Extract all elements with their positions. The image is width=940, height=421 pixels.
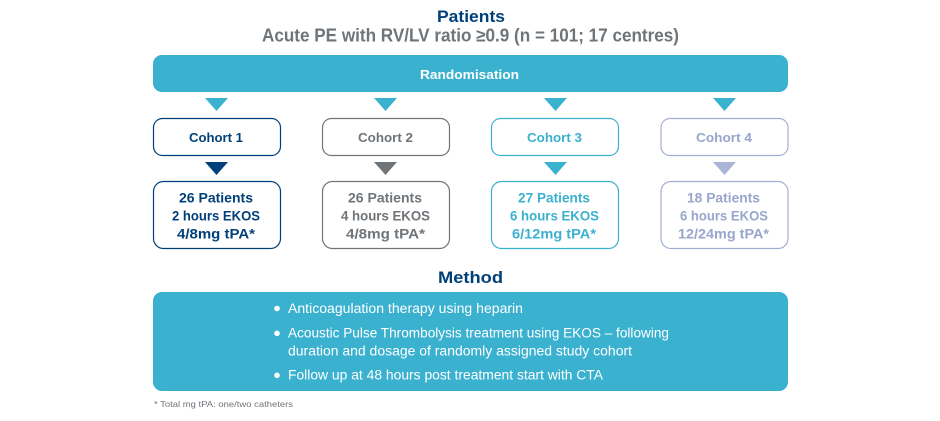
arrow: randomisation to cohort 1 [205, 98, 228, 111]
panel: cohort 1 details: 4/8mg tPA* [177, 226, 256, 242]
panel: cohort 1 [154, 118, 280, 156]
subtitle: inclusion criteria: Acute PE with RV/LV ratio ≥0.9 (n = 101; 17 centres) [262, 26, 679, 46]
bullet: acoustic pulse thrombolysis: Acoustic Pulse Thrombolysis treatment using EKOS – following [288, 326, 669, 340]
panel: cohort 4 [661, 118, 788, 156]
panel: cohort 2 [322, 118, 450, 156]
panel: cohort 2: Cohort 2 [358, 130, 413, 145]
panel: cohort 3: Cohort 3 [527, 130, 582, 145]
panel: cohort 1 details: 2 hours EKOS [172, 208, 260, 224]
heading: Method: Method [438, 268, 503, 287]
panel: randomisation bar [153, 55, 788, 92]
arrow: randomisation to cohort 3 [544, 98, 567, 111]
panel: cohort 4 details: 12/24mg tPA* [678, 226, 770, 242]
bullet: acoustic pulse thrombolysis [274, 326, 669, 358]
panel: cohort 2 details: 4/8mg tPA* [346, 226, 426, 242]
panel: cohort 3 details: 6 hours EKOS [510, 208, 599, 224]
bullet: anticoagulation: Anticoagulation therapy using heparin [288, 301, 523, 316]
panel: cohort 4: Cohort 4 [696, 130, 753, 145]
panel: cohort 3 details: 6/12mg tPA* [512, 226, 597, 242]
bullet: follow up: Follow up at 48 hours post treatment start with CTA [288, 368, 603, 382]
panel: cohort 4 details [661, 182, 788, 248]
arrow: randomisation to cohort 2 [374, 98, 397, 111]
panel: cohort 1: Cohort 1 [189, 130, 243, 145]
panel: cohort 2 details: 26 Patients [348, 190, 422, 206]
bullet: acoustic pulse thrombolysis: duration and dosage of randomly assigned study cohort [288, 344, 632, 358]
panel: cohort 3 [492, 118, 618, 156]
footnote: * Total mg tPA: one/two catheters [154, 399, 293, 409]
panel: randomisation bar: Randomisation [420, 67, 519, 82]
panel: cohort 1 details: 26 Patients [179, 190, 253, 206]
arrow: cohort 2 to details [374, 162, 397, 175]
panel: cohort 3 details [492, 182, 618, 248]
arrow: cohort 4 to details [713, 162, 736, 175]
panel: cohort 2 details [322, 182, 450, 248]
title: Patients: Patients [437, 7, 505, 26]
panel: cohort 3 details: 27 Patients [518, 190, 590, 206]
panel: cohort 4 details: 6 hours EKOS [680, 208, 768, 224]
panel: method [153, 292, 788, 391]
panel: cohort 4 details: 18 Patients [687, 190, 760, 206]
panel: cohort 1 details [154, 182, 280, 248]
arrow: cohort 1 to details [205, 162, 228, 175]
arrow: cohort 3 to details [544, 162, 567, 175]
panel: cohort 2 details: 4 hours EKOS [341, 208, 430, 224]
arrow: randomisation to cohort 4 [713, 98, 736, 111]
